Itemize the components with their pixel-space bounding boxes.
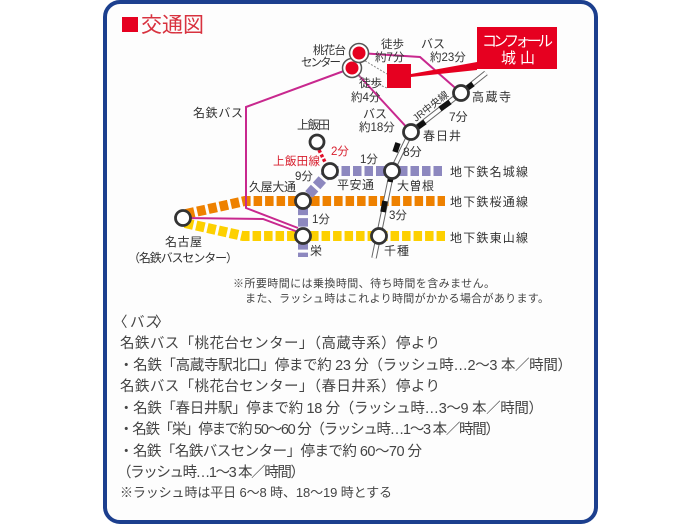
map labels: 久屋大通 (249, 180, 296, 194)
purple subway line (303, 171, 445, 257)
map labels: 約4分 (351, 90, 381, 104)
map labels: 9分 (295, 170, 313, 183)
heading: 交通図: 交通図 (141, 14, 204, 37)
map labels: 上飯田線 (273, 155, 320, 168)
map labels: 徒歩 (381, 37, 404, 51)
note: travel time caveat: また、ラッシュ時はこれより時間がかかる場合があります。 (245, 291, 549, 305)
yellow subway line (185, 223, 445, 236)
label: コンフォール城山 (477, 27, 557, 69)
JR Chuo line (374, 73, 486, 258)
map labels: 春日井 (423, 129, 461, 143)
map labels: 名古屋 (165, 234, 202, 249)
map labels: バス (421, 37, 445, 51)
text block: bus information: 名鉄バス「桃花台センター」（春日井系）停より (120, 378, 440, 395)
note: travel time caveat: ※所要時間には乗換時間、待ち時間を含みません。 (233, 276, 495, 290)
text block: bus information: ※ラッシュ時は平日 6〜8 時、18〜19 時とする (120, 485, 392, 500)
map labels: 名鉄バス (193, 105, 243, 120)
chart: route map (128, 27, 557, 265)
text block: bus information: 〈バス〉 (113, 314, 170, 331)
text block: bus information: ・名鉄「名鉄バスセンター」停まで約 60〜70 分 (119, 443, 422, 460)
map labels (128, 37, 528, 265)
map labels: センター (301, 56, 341, 69)
map labels: 1分 (312, 213, 330, 226)
map labels: 3分 (389, 209, 407, 222)
map labels: 栄 (310, 244, 322, 258)
stations (176, 44, 468, 244)
map labels: 7分 (449, 110, 468, 124)
map labels: 徒歩 (359, 76, 382, 90)
map labels: （名鉄バスセンター） (128, 250, 238, 265)
panel: rounded frame (105, 2, 596, 522)
map labels: 8分 (403, 145, 422, 159)
text block: bus information: ・名鉄「高蔵寺駅北口」停まで約 23 分（ラッシュ時…2〜3 本／時間） (119, 357, 572, 374)
note: travel time caveat (233, 276, 549, 305)
map labels: 地下鉄桜通線 (450, 194, 528, 209)
map labels: 地下鉄名城線 (450, 164, 528, 179)
map labels: 約18分 (359, 120, 395, 134)
map labels: 約23分 (430, 50, 466, 64)
map labels: 2分 (331, 145, 349, 158)
Meitetsu bus lines (183, 53, 461, 232)
text block: bus information (113, 314, 572, 500)
map labels: 約7分 (375, 50, 405, 64)
text block: bus information: ・名鉄「栄」停まで約 50〜60 分（ラッシュ時…1〜3 本／時間） (119, 421, 500, 438)
map labels: 上飯田 (297, 118, 330, 132)
label: コンフォール城山: コンフォール (482, 33, 553, 50)
map labels: バス (363, 107, 387, 121)
map labels: 平安通 (337, 178, 374, 192)
map labels: JR中央線 (410, 88, 451, 124)
walking dotted lines (356, 59, 387, 88)
text block: bus information: ・名鉄「春日井駅」停まで約 18 分（ラッシュ時…3〜9 本／時間） (119, 400, 543, 417)
map labels: 地下鉄東山線 (450, 230, 528, 245)
text block: bus information: 名鉄バス「桃花台センター」（高蔵寺系）停より (120, 335, 440, 352)
orange subway line (186, 201, 445, 214)
map labels: 1分 (360, 153, 378, 166)
map labels: 千種 (384, 244, 409, 258)
label: コンフォール城山: 城山 (501, 50, 535, 67)
map labels: 大曽根 (397, 178, 434, 193)
destination marker: wedge and square (387, 62, 477, 88)
text block: bus information: （ラッシュ時…1〜3 本／時間） (117, 464, 305, 481)
Kamiiida line (319, 150, 327, 166)
map labels: 桃花台 (313, 43, 346, 57)
map labels: 高蔵寺 (472, 90, 511, 104)
